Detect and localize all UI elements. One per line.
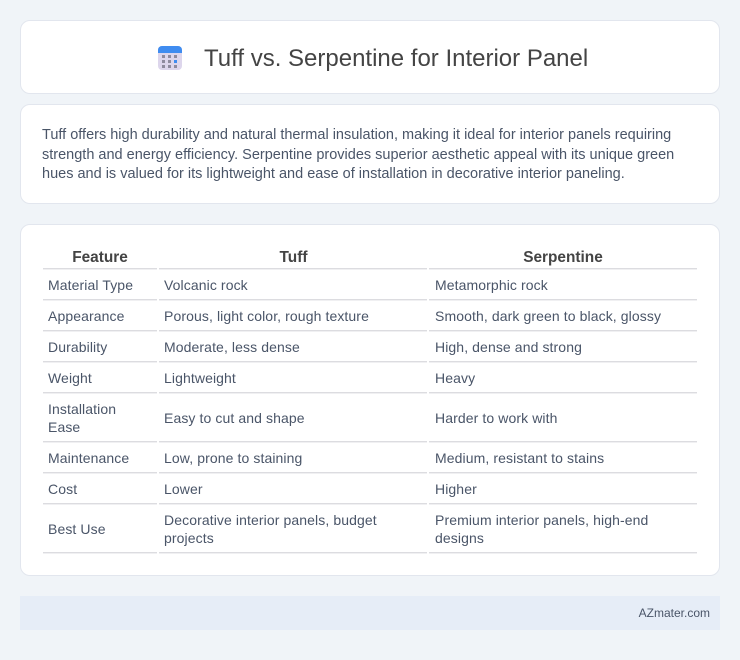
title: Tuff vs. Serpentine for Interior Panel <box>204 45 588 72</box>
intro text: strength and energy efficiency. Serpentine provides superior aesthetic appeal with its unique green <box>42 146 674 162</box>
comparison table: Appearance <box>48 308 125 324</box>
intro text <box>42 127 674 182</box>
intro text: hues and is valued for its lightweight and ease of installation in decorative interior paneling. <box>42 166 625 182</box>
comparison table: Decorative interior panels, budget <box>164 512 377 528</box>
comparison table: Metamorphic rock <box>435 277 548 293</box>
comparison table: designs <box>435 530 484 546</box>
comparison table: Easy to cut and shape <box>164 410 305 426</box>
comparison table: Material Type <box>48 277 133 293</box>
comparison table: Weight <box>48 370 92 386</box>
intro text card <box>20 104 720 204</box>
footer credit: AZmater.com <box>639 606 710 620</box>
comparison table: Medium, resistant to stains <box>435 450 604 466</box>
comparison table: Maintenance <box>48 450 129 466</box>
comparison table: Lower <box>164 481 203 497</box>
comparison table: Volcanic rock <box>164 277 248 293</box>
comparison table: Harder to work with <box>435 410 558 426</box>
comparison table: Durability <box>48 339 107 355</box>
comparison table: Best Use <box>48 521 106 537</box>
comparison table: Premium interior panels, high-end <box>435 512 648 528</box>
comparison table: Heavy <box>435 370 475 386</box>
header: Tuff: Tuff <box>280 249 307 266</box>
comparison table: Ease <box>48 419 80 435</box>
comparison table: High, dense and strong <box>435 339 582 355</box>
comparison table: Lightweight <box>164 370 236 386</box>
header: Serpentine: Serpentine <box>523 249 603 266</box>
intro text: Tuff offers high durability and natural thermal insulation, making it ideal for interior panels requiring <box>42 127 671 143</box>
comparison table: Low, prone to staining <box>164 450 302 466</box>
comparison table: projects <box>164 530 214 546</box>
footer bar <box>20 596 720 630</box>
header: Feature: Feature <box>72 249 128 266</box>
comparison table: Porous, light color, rough texture <box>164 308 369 324</box>
title card <box>20 20 720 94</box>
comparison table: Smooth, dark green to black, glossy <box>435 308 661 324</box>
comparison table: Higher <box>435 481 477 497</box>
comparison table: Moderate, less dense <box>164 339 300 355</box>
comparison table: Installation <box>48 401 116 417</box>
icon: calendar <box>158 46 182 70</box>
comparison table: Cost <box>48 481 77 497</box>
comparison table card <box>20 224 720 576</box>
